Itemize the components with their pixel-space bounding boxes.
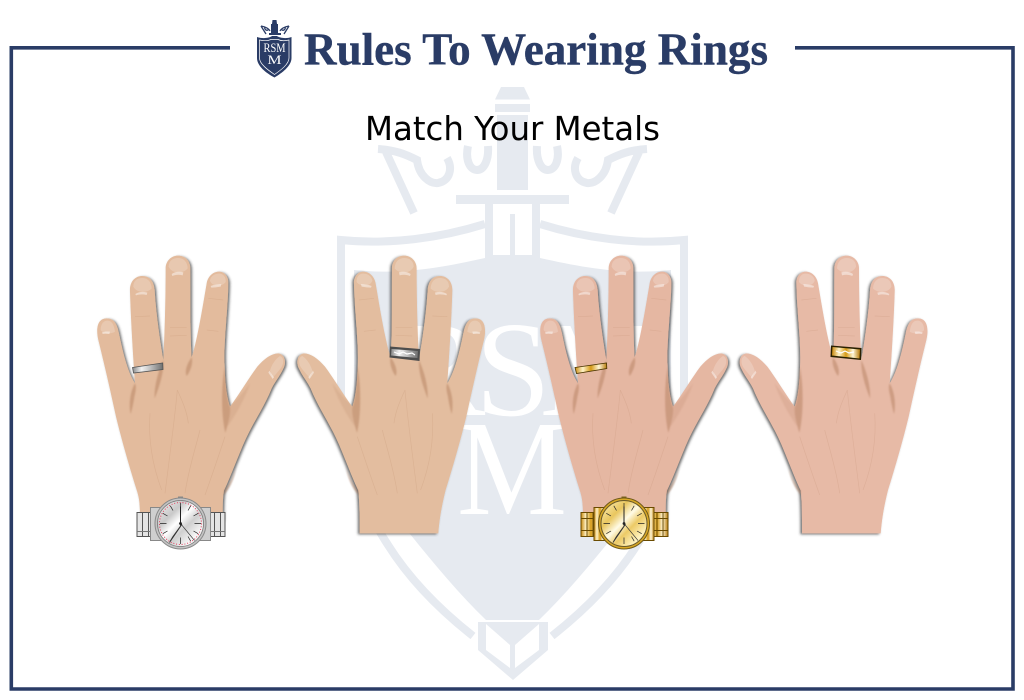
hand 1: lighter skin, silver ring and watch	[97, 256, 285, 549]
gold watch	[581, 496, 668, 549]
watermark: monogram letters	[395, 295, 660, 544]
silver patterned ring	[390, 346, 420, 361]
watermark: shield body	[354, 258, 671, 620]
logo: shield crest	[257, 20, 292, 78]
hand 3 shape	[540, 256, 728, 520]
gold band ring	[575, 363, 607, 374]
silver band ring	[132, 363, 163, 373]
silver dial	[158, 500, 204, 546]
watch hands	[160, 503, 201, 544]
watermark: sword pommel and handle	[495, 87, 530, 190]
minute markers	[160, 502, 202, 544]
background watermark: brand shield	[341, 87, 684, 680]
silver crown	[178, 496, 183, 500]
hand 4: pinker skin, gold ring	[740, 256, 927, 533]
hand 4 shape	[740, 256, 927, 533]
logo monogram	[264, 40, 286, 67]
gold bracelet	[581, 508, 668, 540]
gold crown	[622, 496, 626, 500]
gold case	[598, 498, 650, 549]
watermark: shield outline	[341, 224, 684, 636]
logo shield	[257, 36, 292, 78]
watch hands	[604, 503, 644, 544]
watermark: crown	[378, 146, 647, 213]
logo crown	[261, 26, 289, 34]
title: Rules To Wearing Rings	[304, 24, 768, 74]
silver bracelet	[137, 508, 225, 540]
watermark: monogram letters: S	[475, 295, 551, 445]
gold patterned ring	[830, 346, 862, 360]
silver case	[155, 498, 206, 549]
subtitle: Match Your Metals	[365, 109, 660, 148]
hand 1 shape	[97, 256, 285, 520]
hand 2: lighter skin, silver ring	[297, 256, 485, 533]
logo sword	[269, 20, 281, 35]
hand 2 shape	[297, 256, 485, 533]
hand 3: pinker skin, gold ring and watch	[540, 256, 728, 549]
watermark: monogram letters: M	[457, 394, 567, 544]
watermark: monogram letters: R	[395, 295, 486, 445]
watermark: monogram letters: M	[540, 295, 660, 445]
logo monogram: RSM	[264, 40, 286, 55]
logo monogram: M	[268, 52, 282, 67]
watermark: bottom chevron	[478, 622, 548, 680]
watermark: crossguard and blade	[456, 195, 569, 258]
gold dial	[601, 500, 647, 546]
silver watch	[137, 496, 225, 549]
